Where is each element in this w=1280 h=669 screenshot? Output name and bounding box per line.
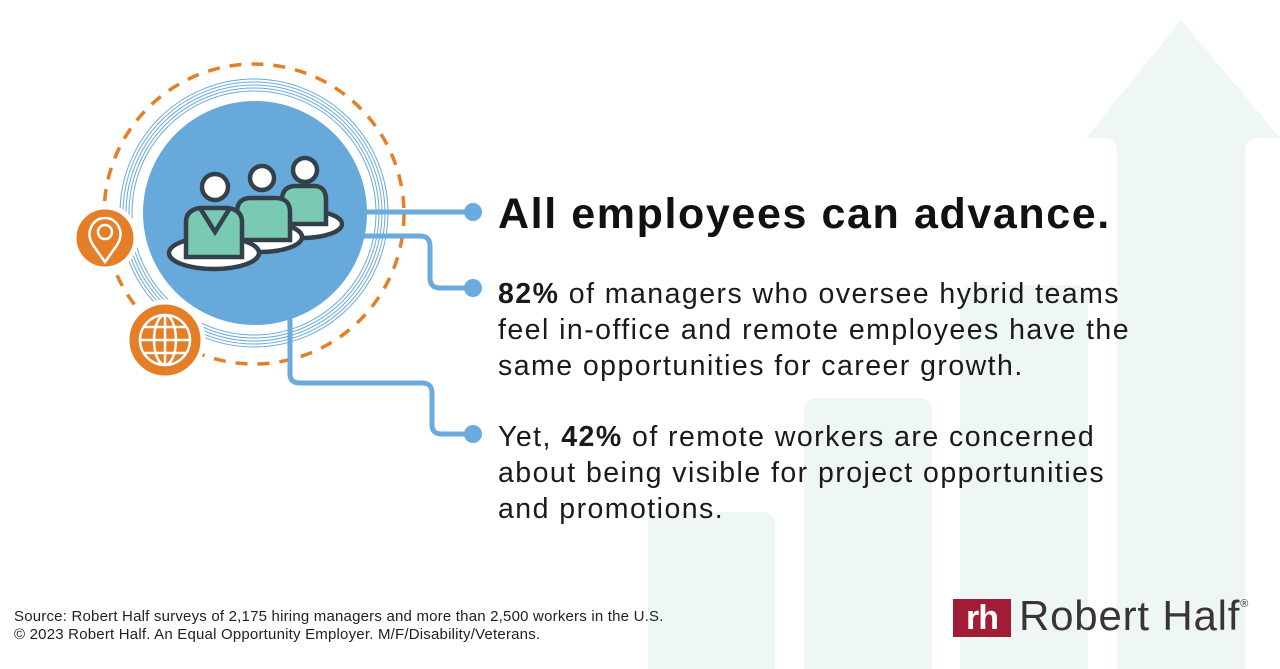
text block: 82% stat: feel in-office and remote employees have the: [498, 314, 1130, 346]
source footnote: [14, 608, 664, 643]
logo: Robert Half: Robert Half®: [1019, 592, 1249, 639]
people emblem graphic: [76, 62, 482, 443]
dashed orange ring: [104, 64, 404, 364]
thin blue rings: [120, 79, 388, 347]
text block: 42% stat: about being visible for project opportunities: [498, 457, 1105, 489]
text block: 82% stat: same opportunities for career growth.: [498, 350, 1024, 382]
icon: location pin: [74, 207, 136, 269]
title: All employees can advance.: [498, 190, 1111, 238]
connector lines: [290, 212, 473, 434]
source footnote: © 2023 Robert Half. An Equal Opportunity Employer. M/F/Disability/Veterans.: [14, 626, 540, 643]
text block: 42% stat: [498, 421, 1105, 525]
text block: 42% stat: Yet, 42% of remote workers are concerned: [498, 421, 1095, 453]
icon: globe: [127, 302, 203, 378]
source footnote: Source: Robert Half surveys of 2,175 hiring managers and more than 2,500 workers in the U.S.: [14, 608, 664, 625]
text block: 82% stat: [498, 278, 1130, 382]
people icon: [169, 158, 342, 269]
text block: 82% stat: 82% of managers who oversee hybrid teams: [498, 278, 1120, 310]
main blue circle: [143, 101, 367, 325]
logo: Robert Half: rh: [966, 599, 998, 637]
text block: 42% stat: and promotions.: [498, 493, 724, 525]
